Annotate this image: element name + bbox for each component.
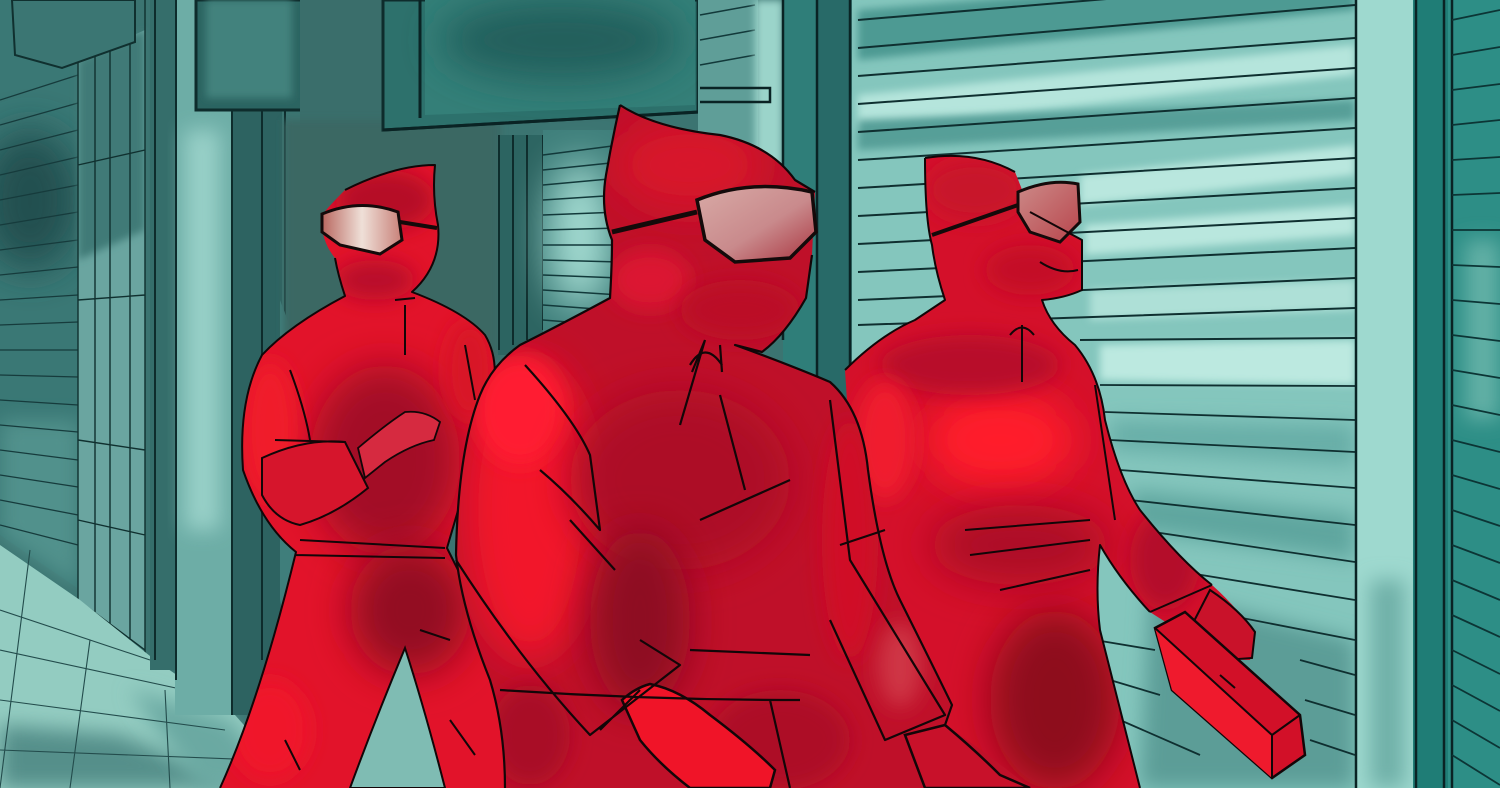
left worker suit [220, 165, 510, 788]
panel: floor [0, 545, 300, 788]
right worker suit [845, 156, 1255, 788]
left worker goggles [322, 205, 402, 254]
panel: right pillar and far shutter [1355, 0, 1500, 788]
figure: left worker [220, 165, 510, 788]
panel: dark back wall [284, 0, 543, 360]
panel: large roller shutter [852, 0, 1357, 788]
left worker shading [230, 170, 495, 780]
centre worker ink lines [456, 105, 952, 788]
figure: right worker [845, 156, 1305, 788]
right worker ink lines [845, 156, 1212, 788]
panel: top left sign [196, 0, 302, 110]
gap between left worker legs [350, 648, 445, 788]
right worker glove [1192, 590, 1255, 660]
left worker forearm and hand [358, 412, 440, 478]
panel: right central pillar [698, 0, 850, 400]
panel: top centre sign [383, 0, 700, 130]
centre worker goggles [697, 187, 816, 262]
centre worker suit [456, 105, 1030, 788]
figure: centre worker [456, 105, 1030, 788]
left worker cuff [262, 441, 368, 525]
right worker goggles [1018, 182, 1080, 242]
icon: toolbox [1155, 612, 1305, 778]
centre worker shading [465, 120, 922, 788]
centre worker far glove [905, 725, 1030, 788]
centre worker near glove [622, 684, 775, 788]
panel: rear small shutter [543, 130, 703, 350]
panel: central pillar [150, 0, 430, 788]
panel: left window with grid [12, 0, 145, 655]
right worker shading [855, 160, 1200, 788]
left worker ink lines [220, 165, 510, 788]
panel: left shutter wall [0, 0, 80, 590]
